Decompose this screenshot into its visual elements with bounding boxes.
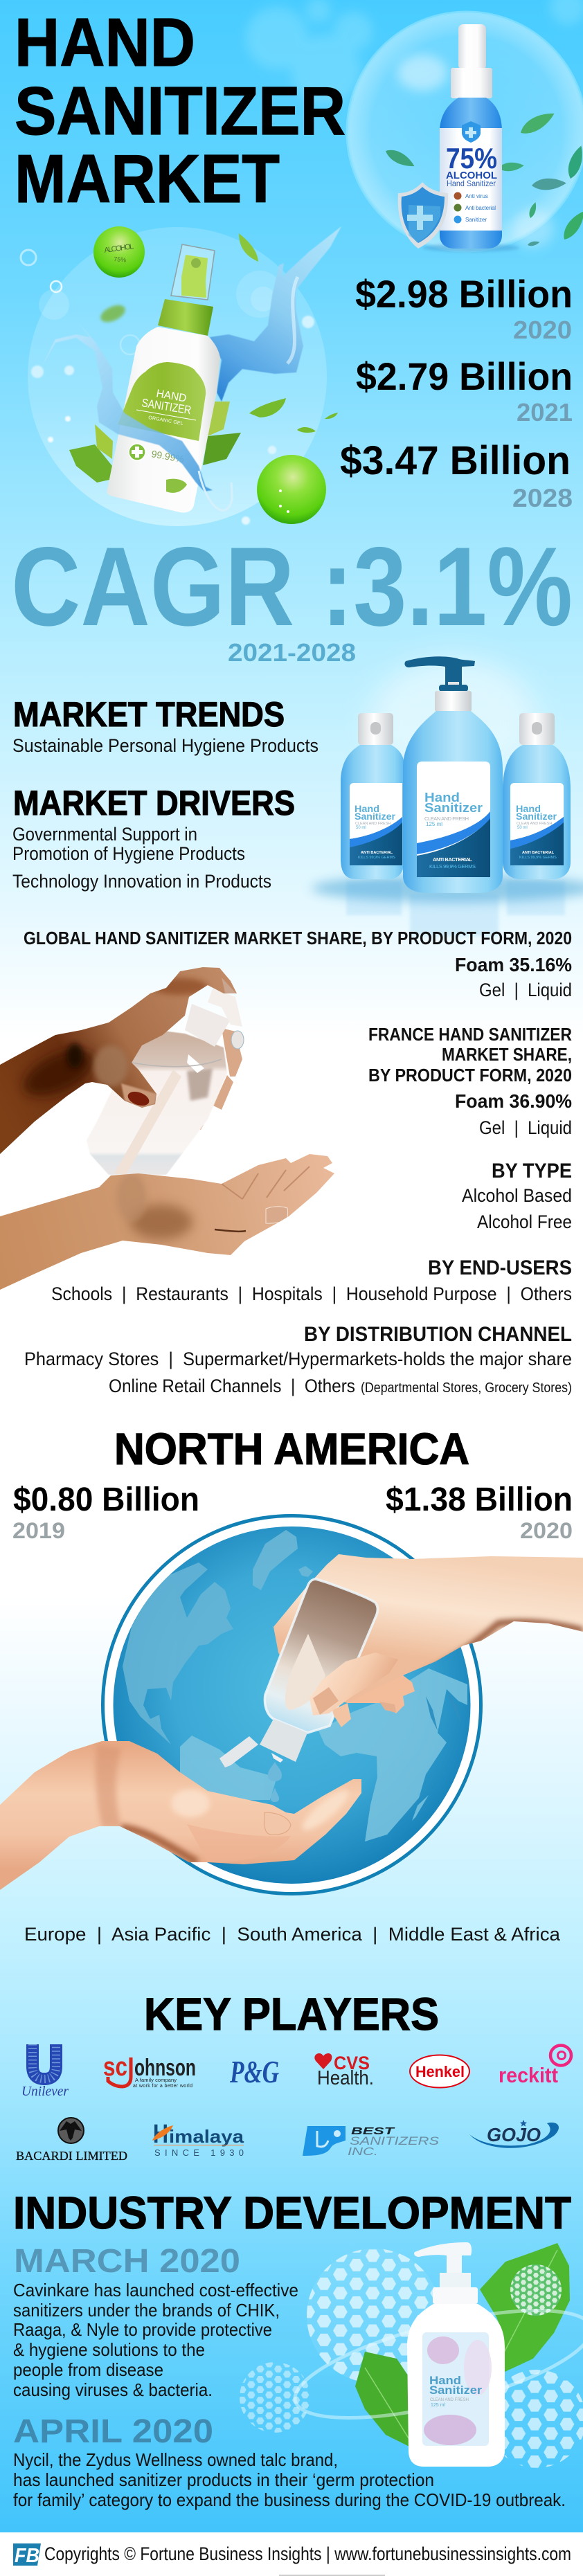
logo: Himalaya: SINCE 1930 [154,2147,244,2158]
march 2020 development: people from disease [13,2359,163,2380]
gel liquid global: Gel | Liquid [479,980,572,1000]
april 2020 development [13,2413,566,2510]
center big bottle: Hand [424,791,460,804]
white pump bottle: CLEAN AND FRESH [430,2398,469,2402]
footer band [0,2532,583,2576]
top right small hex globe [510,2264,562,2316]
logo: Best Sanitizers: INC. [348,2146,378,2158]
title: MARKET [15,141,280,217]
market size 2028: 2028 [512,484,573,512]
illustration: alcohol spray bottle in bubble: 75% [446,142,497,174]
logo: SC Johnson [103,2053,196,2089]
left small bottle: ANTI BACTERIAL [361,851,393,855]
white bottle body [107,327,220,513]
logo: Reckitt [499,2045,571,2087]
fingers behind bottle [197,1028,242,1130]
logo: SC Johnson: at work for a better world [133,2084,192,2089]
left small bottle: Sanitizer [355,811,396,822]
left small bottle: CLEAN AND FRESH [355,822,391,826]
march 2020 development: sanitizers under the brands of CHIK, [13,2300,280,2321]
right small bottle: Hand [516,803,541,814]
logo: SC Johnson: A family company [135,2077,177,2083]
market size 2021: $2.79 Billion [356,354,573,398]
logo: Best Sanitizers: SANITIZERS [350,2134,440,2147]
logo: Best Sanitizers [303,2125,440,2158]
blue shield [398,182,448,249]
north america 2020 value: $1.38 Billion [386,1481,573,1518]
market trends: MARKET TRENDS [13,695,285,734]
left small bottle: 50 ml [356,826,366,830]
droplets [268,1762,282,1781]
illustration: green spray bottle with water splash: ORGANIC GEL [148,415,183,426]
market size 2021: 2021 [517,398,573,426]
foam france share: Foam 36.90% [455,1090,572,1112]
right hand thumb and fingers [310,1652,398,1727]
white pump bottle [407,2242,505,2467]
april 2020 development: APRIL 2020 [13,2413,213,2450]
front splash [42,322,213,492]
leaf cluster [384,108,583,247]
illustration: hex globes, leaves and white pump bottle [240,2242,583,2468]
illustration: green spray bottle with water splash: SANITIZER [141,396,192,417]
right small bottle: CLEAN AND FRESH [517,822,552,826]
pump bottle [87,989,244,1175]
north america 2019 value: $0.80 Billion [13,1481,199,1518]
foam global share: Foam 35.16% [455,954,572,975]
center big bottle [403,656,503,893]
key players heading: KEY PLAYERS [144,1988,439,2039]
green ball alcohol [93,226,145,278]
march 2020 development: Cavinkare has launched cost-effective [13,2280,298,2300]
other regions row: Europe | Asia Pacific | South America | Middle East & Africa [24,1924,561,1945]
illustration: globe with hands [0,1516,583,1894]
right small bottle: KILLS 99,9% GERMS [519,856,557,860]
gel liquid france: Gel | Liquid [479,1117,572,1138]
illustration: alcohol spray bottle in bubble: Sanitizer [465,217,487,223]
right small bottle: 50 ml [517,826,528,830]
illustration: three blue sanitizer bottles [312,656,583,936]
march 2020 development [13,2243,298,2400]
logo: Bacardi: BACARDI LIMITED [16,2149,127,2163]
bottle reflections [346,881,565,936]
march 2020 development: Raaga, & Nyle to provide protective [13,2319,272,2340]
back splash [210,226,341,402]
logo: Bacardi [16,2118,127,2163]
france market share heading [368,1024,572,1086]
illustration: hands pressing pump bottle [0,962,339,1295]
illustration: alcohol spray bottle in bubble: Hand Sanitizer [447,179,496,188]
market size 2021 [356,354,573,426]
green ball alcohol: 75% [114,255,127,264]
small shield on label [462,121,481,143]
green ball bottom [257,455,326,524]
white pump bottle: Hand [429,2374,461,2387]
center big bottle: KILLS 99,9% GERMS [429,863,476,870]
right small bottle: ANTI BACTERIAL [522,851,555,855]
market drivers: Governmental Support in [12,824,197,845]
center big bottle: CLEAN AND FRESH [424,816,469,822]
illustration: alcohol spray bottle in bubble [348,12,583,252]
march 2020 development: MARCH 2020 [14,2243,240,2280]
market trends: Sustainable Personal Hygiene Products [12,735,319,756]
green ball alcohol: ALCOHOL [104,242,134,255]
logo: Himalaya: imalaya [169,2126,244,2147]
logo: P&G: P&G [229,2054,279,2089]
mint leaves [480,2243,570,2372]
logo: Best Sanitizers: BEST [351,2125,396,2137]
green collar [158,299,213,336]
april 2020 development: has launched sanitizer products in their ‘germ protection [13,2469,434,2490]
left small bottle [341,713,405,879]
logo: CVS Health: Health. [317,2067,374,2089]
logo: CVS Health: CVS [334,2053,370,2073]
market size 2020: 2020 [513,316,572,344]
logo: Henkel [410,2055,469,2088]
market drivers: MARKET DRIVERS [13,784,295,822]
big leaves behind bottle [69,444,112,483]
logo: Unilever [21,2044,69,2099]
bottle clear cap [171,244,215,300]
march 2020 development: & hygiene solutions to the [13,2339,205,2360]
illustration: green spray bottle with water splash: HAND [155,388,188,405]
tilted sanitizer bottle [219,1579,377,1802]
title: HAND [15,4,195,80]
by distribution channel [24,1323,572,1396]
right small bottle: Sanitizer [516,811,557,822]
north america 2019 value: 2019 [12,1518,65,1543]
CAGR headline: 2021-2028 [228,638,356,667]
by type: Alcohol Based [462,1185,572,1206]
swirl rings [286,2289,583,2440]
center big bottle: ANTI BACTERIAL [433,856,472,863]
small hex globe [240,2362,310,2433]
right small bottle [503,713,571,879]
by end users: BY END-USERS [428,1257,572,1279]
illustration: green spray bottle with water splash: 99.99% [150,448,185,465]
white pump bottle: Sanitizer [429,2384,482,2397]
title [15,4,346,217]
logo: GOJO [469,2120,559,2148]
center big bottle: Sanitizer [424,801,483,815]
market trends [12,695,319,756]
market size 2028: $3.47 Billion [340,438,571,483]
market size 2028 [340,438,573,512]
upper hand and forearm [0,962,242,1163]
by end users [51,1257,572,1304]
logo: SC Johnson: sc [103,2053,127,2082]
market size 2020 [355,272,573,344]
logo: GOJO: GOJO [487,2124,541,2145]
by distribution channel: Online Retail Channels | Others [109,1376,355,1396]
white pump bottle: 125 ml [431,2403,445,2408]
right hand body [270,1551,583,1717]
market drivers: Technology Innovation in Products [12,871,271,892]
left small bottle: Hand [355,803,379,814]
lower hand and forearm [0,1149,339,1295]
continents [123,1530,467,1841]
illustration: alcohol spray bottle in bubble: ALCOHOL [446,170,497,181]
market size 2020: $2.98 Billion [355,272,573,316]
april 2020 development: Nycil, the Zydus Wellness owned talc brand, [13,2449,338,2470]
left small bottle: KILLS 99,9% GERMS [358,856,395,860]
north america 2019 value [12,1481,199,1543]
footer logo: FB [15,2545,39,2567]
logo: Unilever: Unilever [21,2084,69,2099]
north america heading: NORTH AMERICA [114,1424,469,1474]
logo: SC Johnson: ohnson [134,2055,196,2081]
march 2020 development: causing viruses & bacteria. [13,2379,213,2400]
title: SANITIZER [15,73,346,149]
north america 2020 value: 2020 [520,1518,573,1543]
north america 2020 value [386,1481,573,1543]
logo: CVS Health [314,2053,374,2089]
by type [462,1160,572,1232]
market drivers [12,784,295,892]
illustration: alcohol spray bottle in bubble: Anti bacterial [465,205,496,211]
market drivers: Promotion of Hygiene Products [12,843,245,864]
logo: Henkel: Henkel [415,2063,465,2080]
green pump [181,255,208,298]
illustration: green spray bottle with water splash [21,226,341,526]
right hex globe [487,2370,583,2468]
by type: BY TYPE [492,1160,572,1182]
illustration: alcohol spray bottle in bubble: Anti virus [465,193,488,199]
green arch label [118,362,206,441]
logo: Reckitt: reckitt [499,2063,558,2087]
by type: Alcohol Free [477,1212,572,1232]
decorative bokeh top [246,0,583,104]
logo: Himalaya: H [153,2120,168,2149]
center big bottle: 125 ml [426,821,442,827]
large hex globe [307,2249,441,2383]
left hand [0,1738,367,1893]
logo: Himalaya [152,2120,244,2158]
